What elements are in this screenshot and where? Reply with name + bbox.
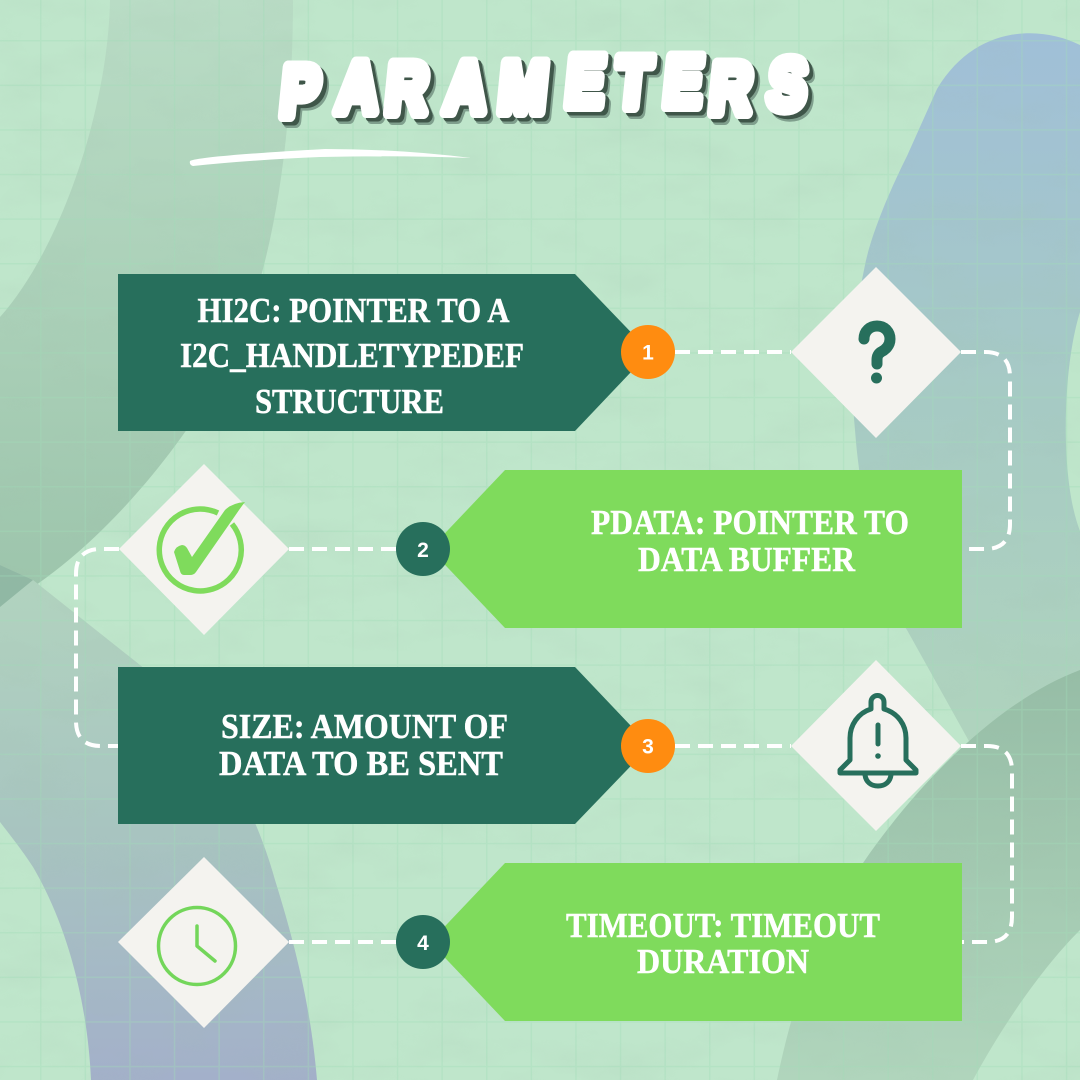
connector: step 4 [289, 940, 396, 944]
icon: question mark in diamond [791, 267, 961, 438]
panel: step 1 hi2c: I2C_HANDLETYPEDEF [180, 336, 524, 375]
panel: step 3 size: DATA TO BE SENT [219, 744, 503, 783]
title: PARAMETERS [277, 41, 811, 131]
badge: number 1 [621, 325, 675, 379]
connector: step 2 to step 3 [76, 549, 396, 746]
icon: bell in diamond [791, 660, 961, 831]
panel: step 1 hi2c [118, 274, 650, 431]
badge: number 2 [396, 522, 450, 576]
panel: step 1 hi2c: STRUCTURE [255, 382, 444, 421]
title underline brush stroke [190, 149, 471, 166]
connector: step 1 to step 2 [675, 352, 1010, 549]
title: PARAMETERS [281, 45, 815, 135]
panel: step 2 pdata: PDATA: POINTER TO [591, 503, 909, 542]
panel: step 1 hi2c: HI2C: POINTER TO A [198, 291, 510, 330]
badge: number 3 [621, 719, 675, 773]
panel: step 2 pdata [430, 470, 962, 628]
panel: step 3 size [118, 667, 650, 824]
panel: step 4 timeout: TIMEOUT: TIMEOUT [566, 906, 880, 945]
badge: number 3: 3 [642, 736, 654, 758]
connector: step 3 to step 4 [675, 746, 1012, 942]
icon: check mark in diamond [119, 464, 289, 635]
icon: clock in diamond [118, 857, 289, 1028]
badge: number 2: 2 [417, 539, 429, 562]
panel: step 4 timeout: DURATION [637, 942, 809, 981]
panel: step 3 size: SIZE: AMOUNT OF [221, 707, 508, 746]
panel: step 2 pdata: DATA BUFFER [638, 540, 856, 579]
badge: number 4: 4 [417, 932, 429, 955]
badge: number 4 [396, 915, 450, 969]
panel: step 4 timeout [430, 863, 962, 1021]
badge: number 1: 1 [642, 342, 654, 364]
title: PARAMETERS [283, 47, 817, 137]
